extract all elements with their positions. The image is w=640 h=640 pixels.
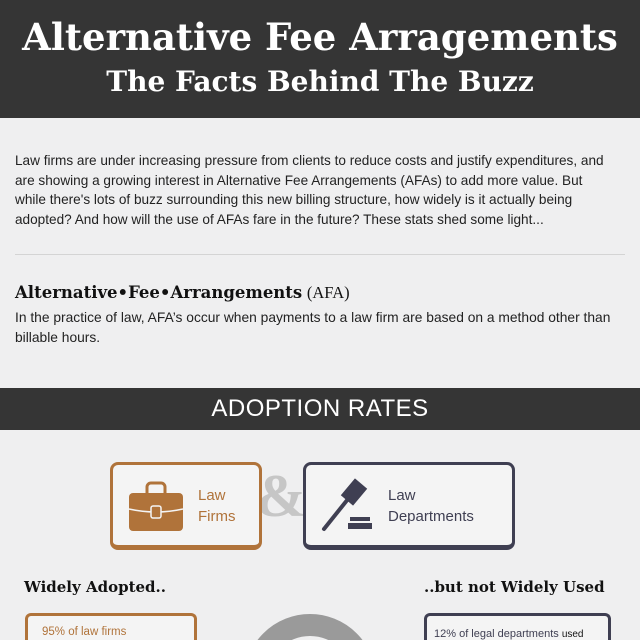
header banner xyxy=(0,0,640,118)
donut chart xyxy=(258,614,362,640)
AFA definition text: In the practice of law, AFA’s occur when payments to a law firm are based on a method other than xyxy=(15,310,610,325)
title: Alternative Fee Arragements xyxy=(22,15,618,59)
label: Departments xyxy=(388,508,474,525)
section bar: adoption rates: ADOPTION RATES xyxy=(211,395,429,422)
label: Law xyxy=(388,487,416,504)
subtitle: The Facts Behind The Buzz xyxy=(106,65,534,98)
intro paragraph xyxy=(15,153,604,227)
ampersand: & xyxy=(256,463,306,529)
heading: not widely used: ..but not Widely Used xyxy=(424,578,605,596)
callout: law firms stat xyxy=(25,613,197,640)
panel: law departments xyxy=(303,462,515,550)
callout: departments stat xyxy=(424,613,611,640)
label: Law xyxy=(198,487,226,504)
label: Firms xyxy=(198,508,236,525)
AFA definition text: billable hours. xyxy=(15,330,100,345)
intro paragraph: adopted? And how will the use of AFAs fare in the future? These stats shed some light... xyxy=(15,212,544,226)
AFA definition text xyxy=(15,310,610,345)
label xyxy=(388,487,474,525)
icon: gavel xyxy=(322,478,372,532)
icon: briefcase xyxy=(129,482,183,531)
panel: law firms xyxy=(110,462,262,550)
heading: widely adopted: Widely Adopted.. xyxy=(24,578,166,596)
section bar: adoption rates xyxy=(0,388,640,430)
intro paragraph: are showing a growing interest in Alternative Fee Arrangements (AFAs) to add more value. But xyxy=(15,172,582,188)
label xyxy=(198,487,236,525)
intro paragraph: while there's lots of buzz surrounding this new billing structure, how widely is it actually being xyxy=(15,192,572,207)
callout: law firms stat: 95% of law firms xyxy=(42,626,126,638)
intro paragraph: Law firms are under increasing pressure from clients to reduce costs and justify expenditures, and xyxy=(15,153,604,168)
callout: departments stat: 12% of legal departments used xyxy=(434,628,584,640)
AFA definition heading: Alternative•Fee•Arrangements (AFA) xyxy=(15,283,350,302)
